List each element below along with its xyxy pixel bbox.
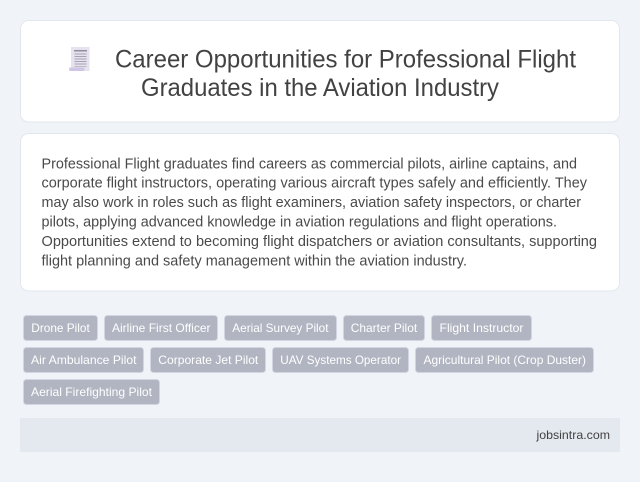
tag: Charter Pilot <box>344 316 424 340</box>
panel: career tags <box>24 316 594 404</box>
tag: Corporate Jet Pilot <box>150 348 266 372</box>
text block: description: Professional Flight graduates find careers as commercial pilots, airline captains, and <box>42 155 577 172</box>
tag: Airline First Officer: Airline First Officer <box>112 321 210 335</box>
footer bar <box>20 418 620 452</box>
tag: Air Ambulance Pilot <box>24 348 144 372</box>
tag: Airline First Officer <box>104 316 218 340</box>
tag: Aerial Firefighting Pilot <box>24 380 160 404</box>
text block: description: flight planning and safety management within the aviation industry. <box>42 252 467 270</box>
tag: Air Ambulance Pilot: Air Ambulance Pilot <box>31 353 137 367</box>
panel: title card <box>20 20 620 122</box>
tag: Aerial Survey Pilot: Aerial Survey Pilot <box>232 321 329 335</box>
tag: Drone Pilot <box>24 316 98 340</box>
tag: Flight Instructor <box>432 316 532 340</box>
icon: paper scroll <box>69 47 90 71</box>
text block: description: may also work in roles such as flight examiners, aviation safety inspectors, or charter <box>42 194 581 211</box>
text block: description: corporate flight instructors, operating various aircraft types safely and efficiently. They <box>42 175 587 192</box>
text block: description: Opportunities extend to becoming flight dispatchers or aviation consultants, supporting <box>42 233 597 250</box>
tag: Aerial Firefighting Pilot: Aerial Firefighting Pilot <box>31 385 153 399</box>
heading <box>115 46 576 102</box>
tag: Flight Instructor: Flight Instructor <box>440 321 524 335</box>
tag: Aerial Survey Pilot <box>224 316 336 340</box>
footer source text: jobsintra.com <box>535 428 610 442</box>
tag: UAV Systems Operator: UAV Systems Operator <box>280 353 401 367</box>
text block: description <box>42 155 597 270</box>
heading: Graduates in the Aviation Industry <box>141 74 499 102</box>
tag: Corporate Jet Pilot: Corporate Jet Pilot <box>158 353 259 367</box>
tag: Drone Pilot: Drone Pilot <box>31 321 90 335</box>
tag: Charter Pilot: Charter Pilot <box>351 321 418 335</box>
text block: description: pilots, applying advanced knowledge in aviation regulations and flight operations. <box>42 214 557 231</box>
tag: Agricultural Pilot (Crop Duster) <box>416 348 594 372</box>
tag: Agricultural Pilot (Crop Duster): Agricultural Pilot (Crop Duster) <box>424 353 586 367</box>
tag: UAV Systems Operator <box>272 348 408 372</box>
heading: Career Opportunities for Professional Flight <box>115 46 576 74</box>
panel: description card <box>20 134 620 291</box>
